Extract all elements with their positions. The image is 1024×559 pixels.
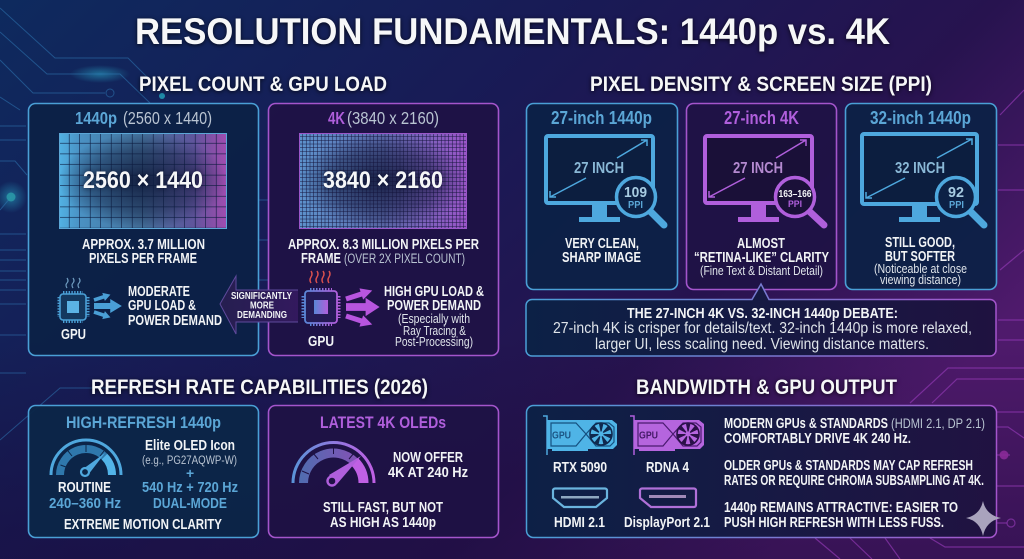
caption: viewing distance) [880, 273, 961, 287]
icon: sparkle [966, 501, 1001, 536]
title: RESOLUTION FUNDAMENTALS: 1440p vs. 4K [135, 11, 890, 52]
elite OLED icon: 540 Hz + 720 Hz [142, 479, 238, 496]
still fast text: AS HIGH AS 1440p [330, 515, 436, 531]
icon: magnifier 109 PPI [616, 178, 664, 225]
high load text: (Especially with [398, 312, 470, 326]
heading: pixel density: PIXEL DENSITY & SCREEN SIZE (PPI) [590, 73, 932, 96]
moderate load text: POWER DEMAND [128, 313, 222, 329]
icon: magnifier 92 PPI: PPI [949, 200, 964, 211]
icon: magnifier 92 PPI: 92 [948, 185, 964, 201]
elite OLED icon: Elite OLED Icon [145, 438, 235, 454]
icon: magnifier 163-166 PPI [776, 178, 824, 225]
elite OLED icon: + [186, 465, 194, 481]
icon: RDNA 4 card: GPU [639, 430, 658, 442]
pixel grid 4K: 3840 × 2160 [323, 167, 443, 194]
icon: monitor 27 inch: 27 INCH [574, 160, 624, 177]
icon: monitor 32 inch [862, 134, 977, 222]
icon: magnifier 163-166 PPI: 163–166 [778, 189, 812, 200]
1440p heading [75, 108, 212, 128]
text: modern GPUs [724, 415, 985, 447]
arrow: significantly more demanding: MORE [250, 300, 274, 312]
now offer text: 4K AT 240 Hz [388, 465, 468, 481]
caption: ALMOST [737, 236, 785, 252]
panel: 4K [268, 104, 498, 356]
panel: high-refresh 1440p: HIGH-REFRESH 1440p [66, 413, 221, 432]
icon: monitor 27 inch 4K: 27 INCH [733, 160, 783, 177]
RTX 5090 label: RTX 5090 [553, 460, 607, 476]
routine rate: 240–360 Hz [49, 495, 121, 512]
icon: magnifier 109 PPI: PPI [628, 200, 643, 211]
HDMI label: HDMI 2.1 [554, 515, 605, 531]
panel: high-refresh 1440p [28, 406, 258, 538]
arrow: significantly more demanding [220, 276, 298, 334]
icon: monitor 27 inch 4K [705, 136, 812, 222]
heading: bandwidth: BANDWIDTH & GPU OUTPUT [636, 376, 897, 399]
high load text: POWER DEMAND [387, 298, 481, 314]
icon: HDMI port [553, 488, 607, 507]
panel: latest 4K OLEDs [268, 406, 498, 538]
panel: bandwidth and GPU output [526, 406, 1001, 538]
pixels per frame 1440p: PIXELS PER FRAME [89, 251, 197, 267]
pixels per frame 4K [288, 237, 479, 267]
icon: GPU moderate [59, 278, 88, 343]
icon: monitor 27 inch [546, 136, 653, 222]
caption: (Fine Text & Distant Detail) [700, 264, 823, 278]
heading: pixel count: PIXEL COUNT & GPU LOAD [139, 73, 387, 96]
caption: STILL GOOD, [885, 235, 955, 251]
moderate load text: MODERATE [128, 284, 190, 300]
arrows: high load [344, 285, 380, 330]
callout: debate: larger UI, less scaling need. Viewing distance matters. [595, 336, 929, 353]
arrow: significantly more demanding: SIGNIFICANTLY [231, 291, 292, 302]
text: 1440p remains attractive: PUSH HIGH REFRESH WITH LESS FUSS. [724, 515, 944, 531]
caption: (Noticeable at close [874, 262, 967, 276]
elite OLED icon: (e.g., PG27AQWP-W) [142, 455, 237, 467]
pixels per frame 1440p [82, 237, 205, 267]
panel: 32-inch 1440p [846, 104, 996, 290]
panel: high-refresh 1440p: EXTREME MOTION CLARITY [64, 517, 222, 533]
routine rate [49, 480, 121, 512]
DisplayPort label: DisplayPort 2.1 [624, 515, 710, 531]
now offer text [388, 450, 468, 481]
pixel grid 1440p: 2560 × 1440 [83, 167, 203, 194]
4K heading: (3840 x 2160) [347, 108, 439, 128]
still fast text: STILL FAST, BUT NOT [323, 500, 443, 516]
text: older GPUs [724, 458, 984, 489]
1440p heading: 1440p [75, 108, 117, 128]
4K heading: 4K [328, 108, 345, 128]
panel: latest 4K OLEDs: LATEST 4K OLEDs [320, 413, 446, 432]
section: bandwidth [526, 376, 1001, 538]
icon: RDNA 4 card [630, 416, 704, 455]
high load text: HIGH GPU LOAD & [384, 284, 484, 300]
heading: refresh rate: REFRESH RATE CAPABILITIES (2026) [91, 376, 428, 399]
caption [562, 236, 641, 266]
pixel grid 4K [299, 133, 467, 229]
RDNA 4 label: RDNA 4 [646, 460, 689, 476]
arrow: significantly more demanding: DEMANDING [237, 310, 287, 321]
section: refresh rate [28, 376, 498, 538]
icon: monitor 32 inch: 32 INCH [895, 160, 945, 177]
caption [874, 235, 967, 287]
pixel grid 1440p [59, 133, 227, 229]
section: pixel count and GPU load [28, 73, 498, 356]
callout: debate: 27-inch 4K is crisper for details/text. 32-inch 1440p is more relaxed, [553, 320, 972, 337]
callout: debate: THE 27-INCH 4K VS. 32-INCH 1440p DEBATE: [627, 305, 898, 322]
arrows: moderate load [93, 291, 122, 321]
high load text: Post-Processing) [395, 335, 473, 349]
caption: SHARP IMAGE [562, 250, 641, 266]
icon: DisplayPort [640, 488, 696, 507]
high load text: Ray Tracing & [403, 324, 467, 338]
caption: VERY CLEAN, [565, 236, 639, 252]
elite OLED icon [142, 438, 238, 512]
caption: BUT SOFTER [885, 249, 955, 265]
panel: 27-inch 1440p: 27-inch 1440p [551, 108, 652, 128]
icon: GPU moderate: GPU [61, 327, 86, 343]
1440p heading: (2560 x 1440) [123, 108, 212, 128]
panel: 27-inch 1440p [526, 104, 678, 290]
pixels per frame 4K: FRAME [301, 251, 341, 267]
pixels per frame 1440p: APPROX. 3.7 MILLION [82, 237, 205, 253]
icon: magnifier 92 PPI [936, 178, 984, 225]
panel: 27-inch 4K: 27-inch 4K [724, 108, 799, 128]
panel: 27-inch 4K [686, 104, 836, 290]
high load text [384, 284, 484, 349]
moderate load text: GPU LOAD & [128, 298, 196, 314]
pixels per frame 4K: APPROX. 8.3 MILLION PIXELS PER [288, 237, 479, 253]
pixels per frame 4K: (OVER 2X PIXEL COUNT) [344, 251, 465, 266]
gauge: 4K [293, 443, 374, 486]
gauge: 1440p [51, 440, 121, 476]
icon: GPU high: GPU [308, 334, 334, 350]
routine rate: ROUTINE [58, 480, 111, 496]
icon: magnifier 109 PPI: 109 [624, 185, 647, 201]
text: modern GPUs: COMFORTABLY DRIVE 4K 240 Hz. [724, 431, 911, 447]
text: 1440p remains attractive [724, 500, 958, 531]
section: pixel density [526, 73, 996, 356]
icon: RTX 5090 card [543, 416, 617, 455]
caption: “RETINA-LIKE” CLARITY [694, 250, 829, 266]
callout: debate [526, 284, 996, 356]
panel: 1440p [28, 104, 258, 356]
caption [694, 236, 829, 278]
icon: GPU high [303, 271, 339, 350]
elite OLED icon: DUAL-MODE [153, 495, 227, 512]
still fast text [323, 500, 443, 531]
icon: RTX 5090 card: GPU [552, 430, 571, 442]
text: 1440p remains attractive: 1440p REMAINS ATTRACTIVE: EASIER TO [724, 500, 958, 516]
text: modern GPUs: MODERN GPUs & STANDARDS [724, 416, 888, 432]
icon: magnifier 163-166 PPI: PPI [788, 199, 802, 210]
now offer text: NOW OFFER [393, 450, 463, 466]
text: modern GPUs: (HDMI 2.1, DP 2.1) [891, 415, 985, 431]
moderate load text [128, 284, 222, 329]
panel: 32-inch 1440p: 32-inch 1440p [870, 108, 971, 128]
